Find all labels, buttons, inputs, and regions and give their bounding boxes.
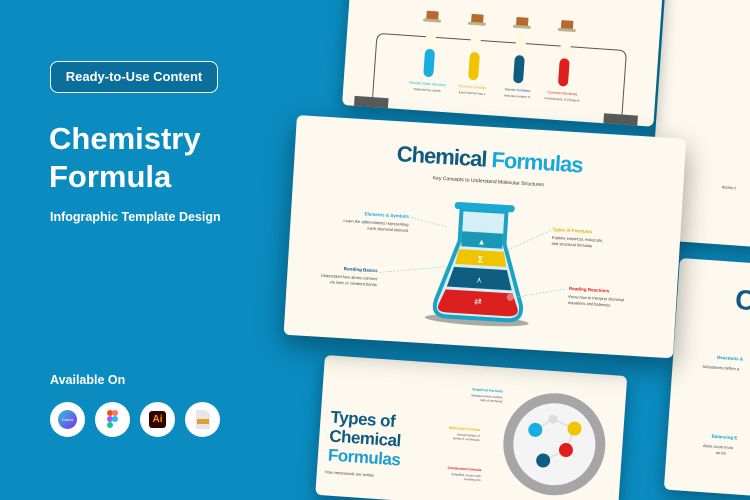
flask illustration: Σ <box>478 254 484 265</box>
labels: ratio of elements <box>480 398 502 404</box>
test tube rack illustration: Each element has a <box>459 90 486 96</box>
test tube rack illustration <box>354 10 638 126</box>
icon: Canva <box>50 402 85 437</box>
subtitle: How compounds are written <box>325 469 374 478</box>
label: Types of Formulas: Types of Formulas <box>552 227 592 234</box>
icon: Canva: Canva <box>62 417 73 422</box>
icon: Illustrator <box>140 402 175 437</box>
label: Elements & Symbols: Elements & Symbols <box>364 211 409 219</box>
icon: Figma <box>95 402 130 437</box>
flask illustration: ⋏ <box>476 275 483 285</box>
test tube rack illustration: Atomic Numbers <box>504 87 531 93</box>
labels: Actual number of <box>457 432 480 438</box>
right lower slide text: on bo <box>716 450 726 455</box>
label: Types of Formulas: Explore empirical, molecular, <box>552 235 603 243</box>
labels: bonding info <box>464 477 481 482</box>
label: Bonding Basics: Understand how atoms connect <box>321 273 377 281</box>
app icons <box>50 402 220 437</box>
right lower slide text: Balancing E <box>711 434 738 440</box>
main slide: Chemical Formulas <box>284 115 686 358</box>
test tube rack illustration: Indicates number of <box>504 93 530 99</box>
icon: Illustrator: Ai <box>152 414 162 425</box>
test tube rack illustration: Element Symbols <box>459 84 487 90</box>
label: Elements & Symbols <box>343 211 409 233</box>
right lower slide text: Reactants & <box>717 355 743 362</box>
label: Reading Reactions: Know how to interpret chemical <box>568 294 624 302</box>
test tube rack illustration: Periodic Table Structure <box>409 81 446 87</box>
labels: atoms in a molecule <box>453 436 480 442</box>
badge: Ready-to-Use Content <box>50 61 218 93</box>
right lower slide text <box>702 284 750 455</box>
Available On: Available On <box>50 373 125 387</box>
label: Types of Formulas: and structural formulas <box>552 240 592 248</box>
magnifier illustration <box>503 393 606 496</box>
heading: Types of Chemical Formulas <box>327 408 401 469</box>
right lower slide text: Substances before a <box>702 364 739 371</box>
subheading: Infographic Template Design <box>50 210 221 224</box>
right lower slide text: Atom count must <box>703 443 733 450</box>
title: Chemical Formulas <box>396 141 583 177</box>
main heading: Formula <box>49 159 171 194</box>
background slide: right lower <box>664 258 750 500</box>
flask illustration: ▲ <box>477 237 486 247</box>
main heading <box>49 121 201 194</box>
label: Reading Reactions: equations and balances. <box>568 299 612 307</box>
labels: Simplified version with <box>451 472 481 478</box>
test tube rack illustration: Organized by atomic <box>413 87 442 93</box>
label: Reading Reactions: Reading Reactions <box>569 286 610 293</box>
label: Bonding Basics <box>321 266 378 287</box>
slide: types of chemical formulas (bottom) <box>315 355 627 500</box>
flask illustration: ⇄ <box>474 296 482 307</box>
heading: Types of Chemical Formulas: Formulas <box>327 445 401 469</box>
label: Types of Formulas <box>552 227 603 248</box>
heading: Types of Chemical Formulas: Chemical <box>329 427 401 450</box>
label: Bonding Basics: Bonding Basics <box>344 266 378 273</box>
heading: Types of Chemical Formulas: Types of <box>330 408 396 431</box>
label: Bonding Basics: via ionic or covalent bonds <box>330 279 377 287</box>
label: Elements & Symbols: Learn the abbreviations representing <box>343 218 409 227</box>
label: Elements & Symbols: each chemical element <box>367 225 408 233</box>
background slide: right upper <box>648 0 750 253</box>
label: Reading Reactions <box>568 286 624 307</box>
labels: Empirical Formula <box>472 387 503 393</box>
main heading: Chemistry <box>49 121 201 156</box>
labels: Molecular Formula <box>449 426 480 432</box>
test tube rack illustration: Common Elements <box>547 90 578 96</box>
slide: test tubes (top) <box>342 0 667 127</box>
text: right upper fragments: Atoms c <box>722 184 736 190</box>
test tube rack illustration: H (Hydrogen), O (Oxygen) <box>544 96 580 103</box>
badge: Ready-to-Use Content: Ready-to-Use Content <box>66 69 202 84</box>
labels: Simplest whole-number <box>471 393 503 399</box>
subtitle: Key Concepts to Understand Molecular Structures <box>433 175 544 188</box>
labels: Condensed Formula <box>447 466 481 472</box>
flask illustration <box>424 202 529 326</box>
labels <box>447 387 503 482</box>
icon: EPS <box>185 402 220 437</box>
